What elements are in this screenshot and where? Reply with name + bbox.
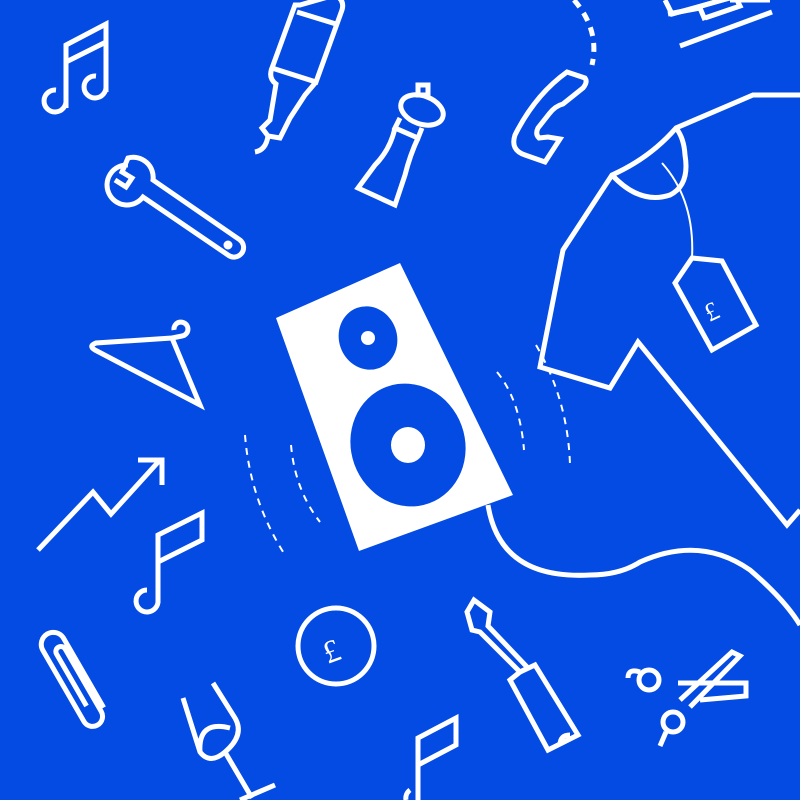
large driver [333,367,483,523]
£ on tag: £ [700,296,724,328]
icon: phone handset [514,72,586,162]
icon: bottom music note [406,718,456,800]
icon: growth arrow [38,460,162,550]
small driver [330,298,406,378]
speaker cable [488,505,800,625]
icon: single music note [136,513,202,612]
sound waves [245,345,570,555]
icon: paperclip [37,628,110,730]
icon: stacked objects top right [665,0,772,46]
icon: double music note [44,24,106,112]
icon: wine glass [183,683,275,800]
icon: wrench [107,157,244,257]
speaker [276,263,513,551]
icon: screwdriver [467,600,578,750]
icon: clothes hanger [92,322,200,405]
icon: pepper grinder [358,85,447,205]
icon: t-shirt with price tag [540,95,800,525]
illustration: £ [318,631,345,671]
dashed cord [574,0,594,65]
icon: marker pen [255,0,343,152]
icon: pound coin [298,608,374,684]
icon: scissors [628,652,746,746]
